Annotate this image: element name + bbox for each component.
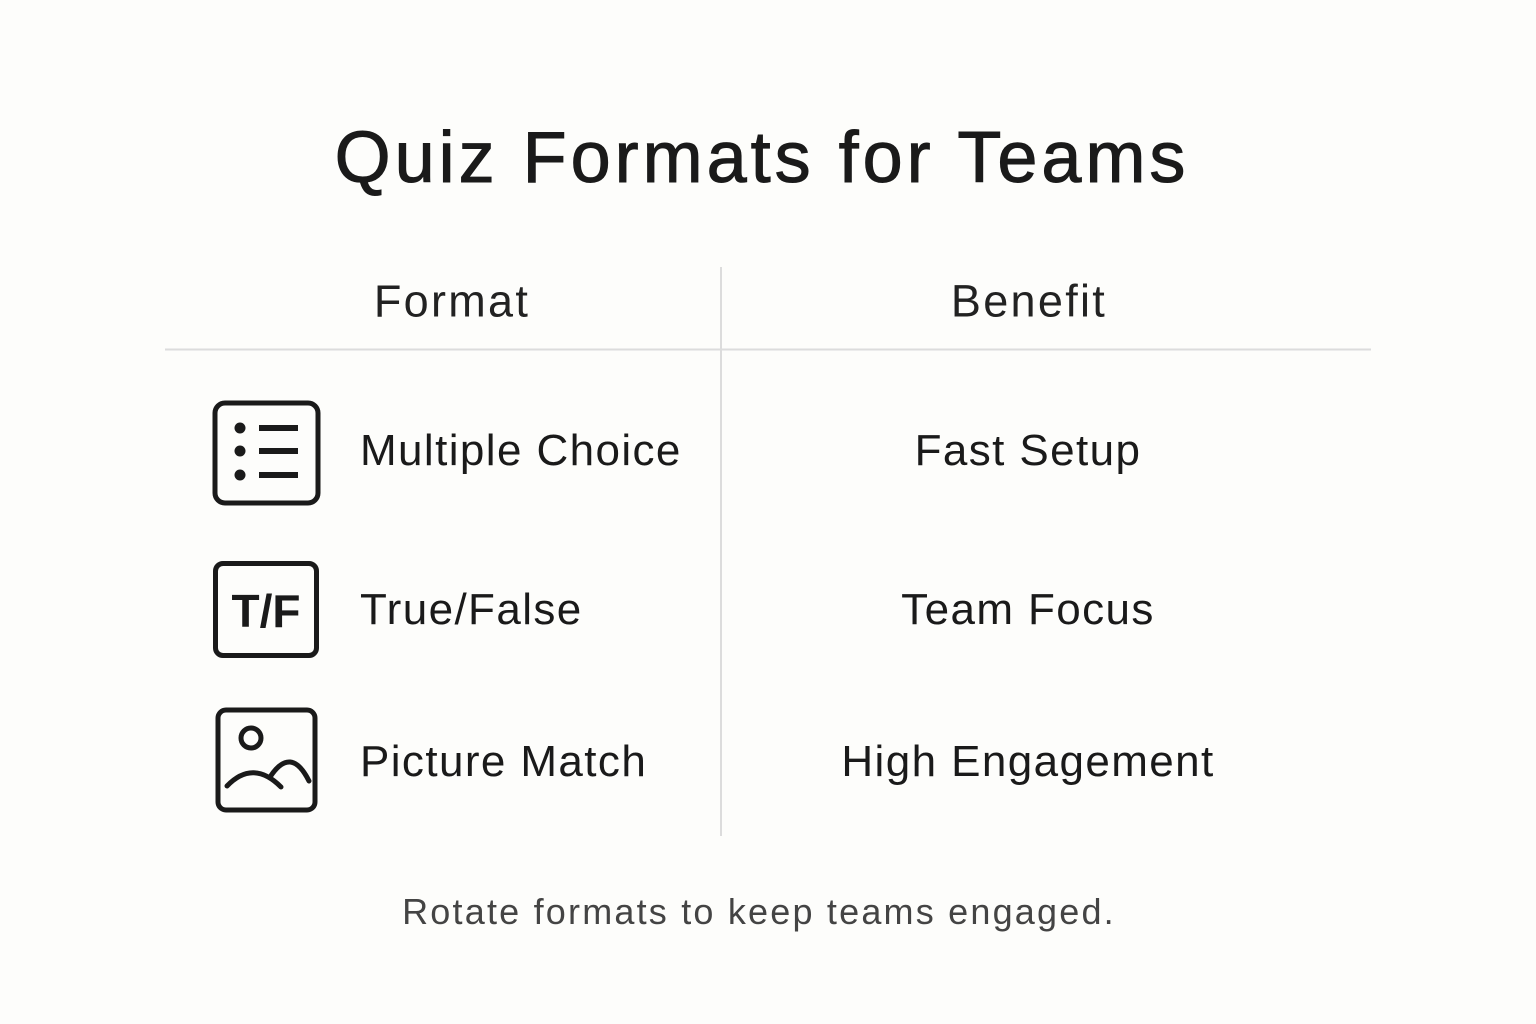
footer note: Rotate formats to keep teams engaged. [402, 891, 1116, 932]
column header: Format: Format [374, 276, 530, 326]
icon: multiple choice list [212, 400, 320, 506]
icon: true/false [213, 561, 319, 658]
row 2 format: True/False [360, 585, 583, 634]
column header: Benefit: Benefit [951, 276, 1107, 326]
title: Quiz Formats for Teams [335, 118, 1189, 198]
row 3 benefit: High Engagement [841, 737, 1215, 786]
row 3 format: Picture Match [360, 737, 647, 786]
icon: picture [216, 708, 318, 812]
icon: true/false: T/F [232, 585, 300, 637]
row 1 format: Multiple Choice [360, 426, 682, 475]
row 1 benefit: Fast Setup [915, 426, 1141, 475]
row 2 benefit: Team Focus [901, 585, 1155, 634]
